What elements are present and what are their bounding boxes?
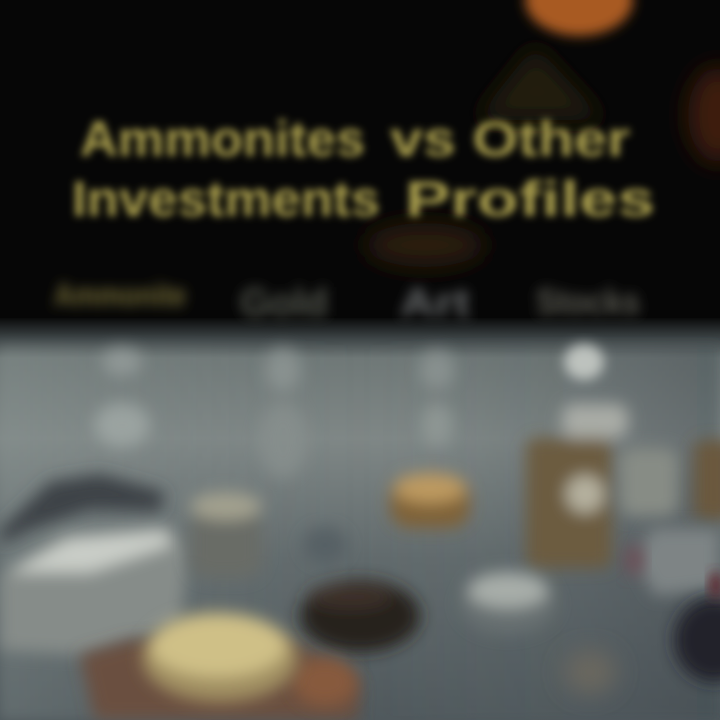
white dish right xyxy=(635,528,720,596)
copper edge highlight xyxy=(293,658,357,706)
small dark object xyxy=(303,527,347,563)
reflections on table xyxy=(94,348,455,478)
red accent xyxy=(709,571,720,599)
white block left xyxy=(0,525,188,655)
title line 2 end: Profiles xyxy=(405,171,655,227)
wooden board xyxy=(80,640,360,720)
dim triangular glow xyxy=(475,45,605,120)
pink accent xyxy=(624,544,644,576)
amber glow behind title xyxy=(365,223,485,267)
faint reflection bottom xyxy=(564,650,616,694)
title line 1: Ammonites xyxy=(80,111,365,167)
bokeh light: top orange xyxy=(525,0,633,36)
white reflection right xyxy=(564,344,604,380)
bokeh light: right amber xyxy=(688,67,720,163)
pale jar xyxy=(190,492,262,578)
dark object far right xyxy=(674,598,720,682)
dark stone xyxy=(300,580,420,652)
golden soap xyxy=(390,473,470,528)
label 1: Ammonite xyxy=(54,277,186,313)
brown bottle xyxy=(526,404,628,568)
column labels xyxy=(54,277,640,325)
label 4: Stocks xyxy=(536,281,640,322)
dark backdrop xyxy=(0,0,720,340)
dark tool top left xyxy=(0,474,165,545)
label 2: Gold xyxy=(240,281,328,325)
amber jar far right xyxy=(694,440,720,520)
white stone xyxy=(460,572,556,634)
cream soap disc xyxy=(142,613,298,702)
pale jar right xyxy=(620,448,678,516)
title line 1 end: vs Other xyxy=(390,111,630,167)
title line 2: Investments xyxy=(72,171,380,227)
label 3: Art xyxy=(400,281,470,325)
table surface xyxy=(0,318,720,720)
title xyxy=(72,111,655,227)
